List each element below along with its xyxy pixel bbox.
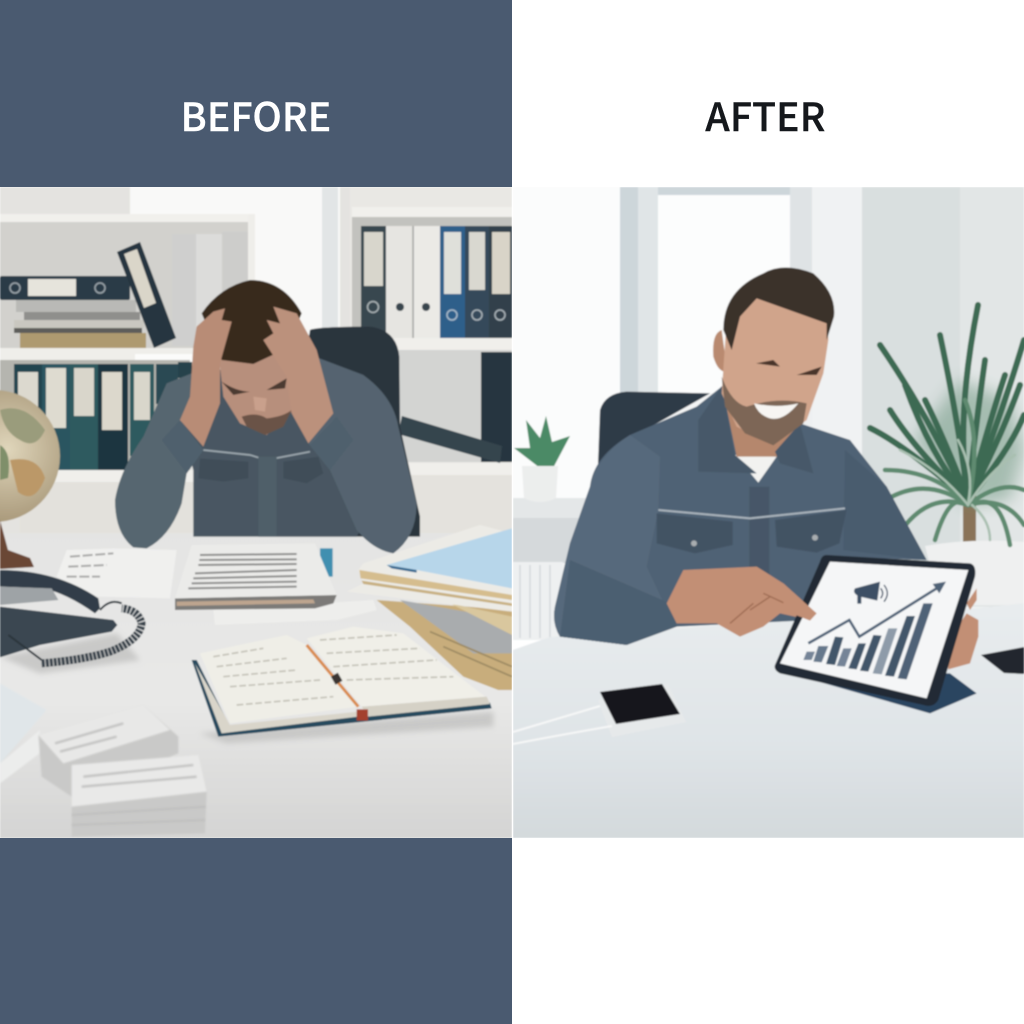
telephone — [0, 570, 142, 663]
right shelving unit — [352, 207, 512, 474]
beard — [722, 377, 807, 445]
bright wall — [564, 393, 966, 628]
stressed man in chair — [115, 280, 420, 553]
collars — [698, 386, 757, 473]
right hand and forearm — [263, 307, 333, 443]
window — [620, 187, 812, 394]
large palm plant — [870, 305, 1024, 605]
open notebook — [192, 627, 492, 737]
folder pile — [347, 525, 512, 690]
smartphone on desk — [513, 684, 686, 744]
tablet stand — [783, 672, 977, 713]
office wall and window — [0, 187, 350, 534]
placket — [750, 487, 769, 574]
face — [219, 354, 292, 436]
second phone at desk edge — [981, 647, 1024, 674]
shirt — [554, 387, 927, 645]
sleeve shading — [554, 435, 673, 645]
globe — [0, 390, 60, 522]
left shelving unit — [0, 214, 255, 482]
torso — [182, 369, 359, 538]
right wall — [862, 187, 960, 562]
heading: after: AFTER — [705, 87, 826, 143]
heading: before: BEFORE — [181, 87, 331, 143]
right sleeve — [308, 357, 417, 553]
left hand and forearm — [180, 308, 232, 447]
lower paper sheet — [254, 605, 333, 611]
panel: after photo scene — [513, 187, 1024, 838]
chair — [598, 392, 710, 473]
left sleeve — [114, 374, 192, 550]
panel: before footer band — [0, 838, 512, 1024]
center paper stack — [174, 552, 337, 611]
icon: megaphone — [854, 582, 887, 604]
loose paper left — [57, 548, 177, 598]
pointing hand — [667, 567, 817, 637]
pockets — [657, 513, 733, 553]
chest seam and pockets — [203, 450, 310, 460]
binders lower shelf — [14, 362, 192, 470]
hair — [723, 267, 834, 350]
small potted plant — [514, 416, 570, 502]
desk — [513, 603, 1024, 838]
panel: before header band — [0, 0, 512, 187]
neck — [725, 400, 803, 457]
bar chart with trend arrow — [803, 582, 946, 679]
index card stacks and blurred paper — [0, 722, 206, 836]
gripping hand — [947, 613, 978, 669]
ear — [713, 330, 727, 372]
face — [722, 283, 828, 445]
pointing fingertip over tablet — [783, 583, 817, 621]
desk — [0, 533, 512, 838]
desk items — [0, 525, 512, 837]
desk shadows — [0, 633, 493, 743]
panel: after footer band — [513, 838, 1024, 1024]
undershirt — [735, 455, 777, 483]
hair — [202, 280, 302, 364]
panel: before photo scene — [0, 187, 512, 838]
happy man in chair — [554, 267, 927, 645]
window sill and radiator — [513, 498, 593, 640]
panel: after header band — [513, 0, 1024, 187]
tablet body — [775, 555, 975, 706]
office chair — [277, 327, 420, 537]
smile — [754, 403, 798, 419]
globe stand — [0, 520, 34, 569]
chest seam — [658, 508, 845, 518]
tablet — [775, 555, 978, 713]
